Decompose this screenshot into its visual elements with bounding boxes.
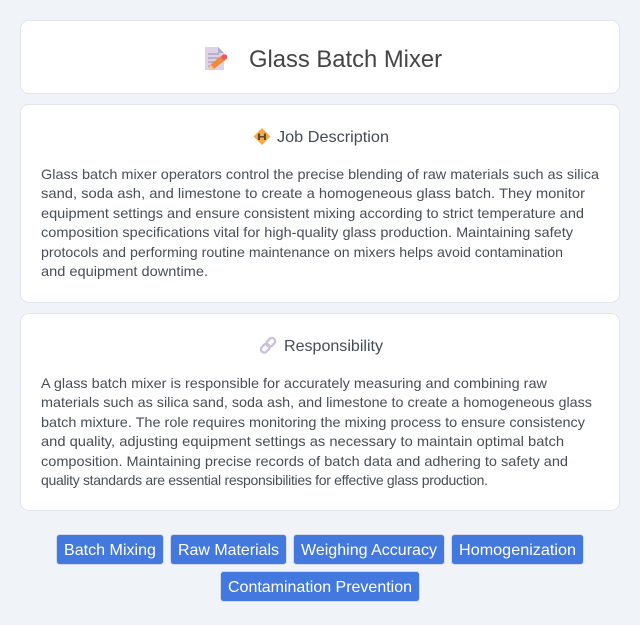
tag: Homogenization: Homogenization <box>459 542 576 559</box>
text block: responsibility: A glass batch mixer is responsible for accurately measuring and combining raw <box>41 375 548 391</box>
text block: job description: composition specifications vital for high-quality glass production. Maintaining safety <box>41 224 573 240</box>
text block: job description: Glass batch mixer operators control the precise blending of raw materials such as silica <box>41 166 599 182</box>
tag: Contamination Prevention <box>220 572 420 602</box>
heading: responsibility: Responsibility <box>284 338 383 355</box>
title: Glass Batch Mixer <box>249 46 442 73</box>
tag: Contamination Prevention: Contamination Prevention <box>228 579 412 596</box>
text block: job description <box>41 166 599 279</box>
icon: link <box>260 337 276 354</box>
heading: job description: Job Description <box>277 129 389 146</box>
text block: responsibility: materials such as silica sand, soda ash, and limestone to create a homogeneous glass <box>41 394 592 410</box>
text block: job description: equipment settings and ensure consistent mixing according to strict temperature and <box>41 205 584 221</box>
text block: responsibility: quality standards are essential responsibilities for effective glass production. <box>41 472 488 488</box>
text block: job description: and equipment downtime. <box>41 263 208 279</box>
panel: job description <box>20 104 620 302</box>
tag: Batch Mixing <box>56 534 164 564</box>
tag: Raw Materials: Raw Materials <box>178 542 279 559</box>
text block: responsibility <box>41 375 592 488</box>
panel: title card <box>20 20 620 94</box>
text block: responsibility: and quality, adjusting equipment settings as necessary to maintain optimal batch <box>41 433 564 449</box>
text block: responsibility: composition. Maintaining precise records of batch data and adhering to safety and <box>41 453 568 469</box>
text block: responsibility: batch mixture. The role requires monitoring the mixing process to ensure consistency <box>41 414 585 430</box>
text block: job description: protocols and performing routine maintenance on mixers helps avoid contamination <box>41 244 563 260</box>
text block: job description: sand, soda ash, and limestone to create a homogeneous glass batch. They monitor <box>41 185 585 201</box>
icon: construction sign <box>254 128 270 145</box>
panel: responsibility <box>20 314 620 510</box>
tag: Batch Mixing: Batch Mixing <box>64 542 156 559</box>
tag: Weighing Accuracy <box>294 534 444 564</box>
icon: memo with pencil <box>205 47 227 70</box>
tag: Raw Materials <box>170 534 286 564</box>
tag: Homogenization <box>452 534 584 564</box>
tag: Weighing Accuracy: Weighing Accuracy <box>301 542 437 559</box>
